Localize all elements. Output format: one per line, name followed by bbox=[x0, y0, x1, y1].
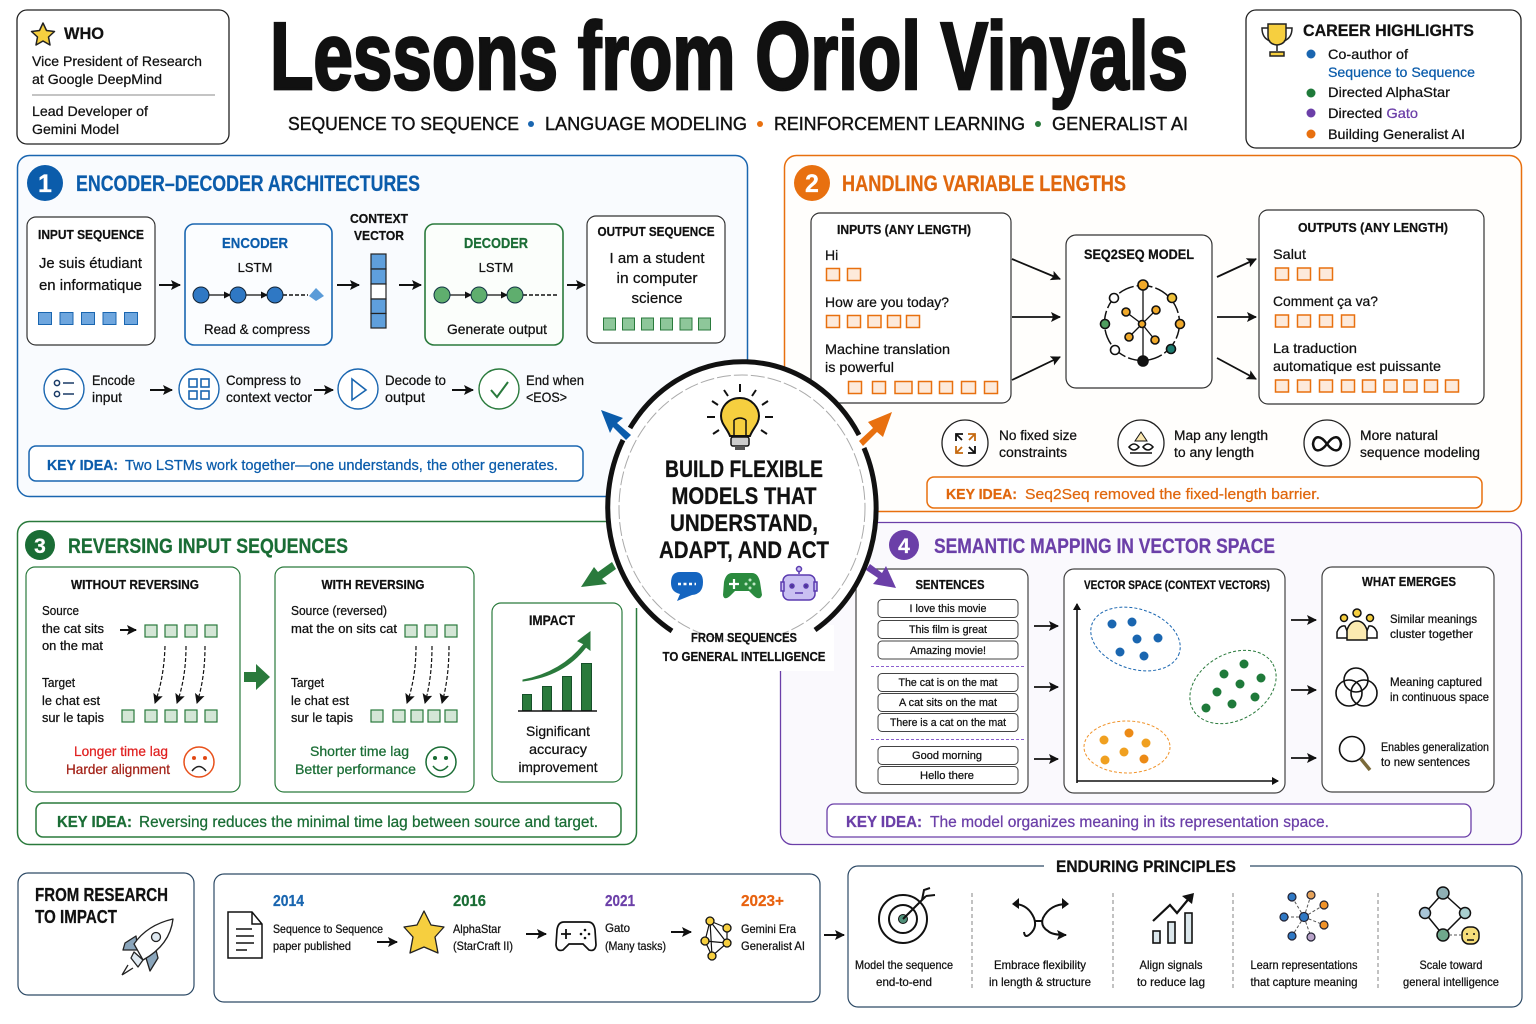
step: end: <EOS> bbox=[526, 389, 567, 405]
timeline 2023+ bbox=[701, 893, 805, 960]
key idea 4: KEY IDEA: bbox=[846, 814, 922, 831]
seq2seq model box: SEQ2SEQ MODEL bbox=[1084, 246, 1194, 262]
feature: natural modeling: sequence modeling bbox=[1360, 445, 1480, 460]
what emerges box: cluster together bbox=[1390, 627, 1473, 641]
inputs box: is powerful bbox=[825, 359, 894, 375]
impact box: accuracy bbox=[529, 741, 587, 757]
output sequence box: science bbox=[632, 290, 682, 307]
timeline 2023+: Generalist AI bbox=[741, 939, 805, 953]
feature: map any length: to any length bbox=[1174, 445, 1254, 460]
hub heading: ADAPT, AND ACT bbox=[659, 537, 829, 564]
step: compress: Compress to bbox=[226, 372, 301, 388]
principle: learn representations: that capture meaning bbox=[1250, 975, 1358, 989]
principle: model end-to-end: end-to-end bbox=[876, 975, 932, 989]
timeline 2016: 2016 bbox=[453, 893, 486, 910]
key idea 3 bbox=[36, 803, 621, 837]
inputs box bbox=[811, 213, 1011, 403]
timeline 2021: (Many tasks) bbox=[605, 939, 666, 953]
encoder box: LSTM bbox=[238, 260, 272, 275]
hub background bbox=[608, 363, 876, 671]
outputs box: Salut bbox=[1273, 246, 1306, 262]
outputs box: La traduction bbox=[1273, 340, 1357, 356]
key idea 2: KEY IDEA: bbox=[946, 486, 1017, 503]
career list: Directed Gato bbox=[1328, 105, 1418, 121]
icon: overlapping circles bbox=[1336, 668, 1377, 706]
arrow bbox=[452, 389, 473, 391]
key idea 1: Two LSTMs work together—one understands, the other generates. bbox=[125, 457, 558, 474]
arrow bbox=[314, 389, 333, 391]
with reversing box: mat the on sits cat bbox=[291, 622, 398, 636]
without reversing box: sur le tapis bbox=[42, 711, 104, 725]
who text bbox=[32, 53, 215, 137]
arrow: hub to panel 1 bbox=[601, 410, 631, 440]
inputs box: INPUTS (ANY LENGTH) bbox=[837, 222, 971, 237]
inputs box: Machine translation bbox=[825, 341, 950, 357]
what emerges box bbox=[1322, 567, 1494, 792]
panel: who bbox=[17, 10, 229, 144]
icon: trophy bbox=[1262, 24, 1292, 56]
principle: scale toward general intelligence: general intelligence bbox=[1403, 975, 1499, 989]
principles heading: ENDURING PRINCIPLES bbox=[1056, 857, 1236, 876]
arrows to what emerges bbox=[1291, 620, 1316, 758]
timeline 2014: Sequence to Sequence bbox=[273, 922, 383, 936]
feature: no fixed size bbox=[942, 420, 1077, 466]
career list: Sequence to Sequence bbox=[1328, 64, 1475, 80]
with reversing box: le chat est bbox=[291, 694, 350, 708]
sentences box: I love this movie bbox=[910, 603, 986, 615]
vector space chart: VECTOR SPACE (CONTEXT VECTORS) bbox=[1084, 578, 1270, 592]
arrow bbox=[377, 941, 397, 943]
principle: align signals: Align signals bbox=[1140, 958, 1202, 972]
step: decode: Decode to bbox=[385, 372, 446, 388]
subtitle: GENERALIST AI bbox=[1052, 114, 1188, 134]
arrows to model bbox=[1012, 259, 1060, 380]
key idea 2 bbox=[927, 477, 1482, 508]
key idea 3: KEY IDEA: bbox=[57, 814, 132, 831]
encoder box bbox=[185, 224, 332, 345]
sentences box: Amazing movie! bbox=[910, 645, 986, 657]
context vector: VECTOR bbox=[354, 228, 405, 243]
who text: at Google DeepMind bbox=[32, 71, 162, 87]
principle: learn representations bbox=[1250, 891, 1358, 989]
who text: Vice President of Research bbox=[32, 53, 202, 69]
sentences box: The cat is on the mat bbox=[898, 677, 998, 689]
without reversing box: the cat sits bbox=[42, 622, 104, 636]
timeline 2014: paper published bbox=[273, 939, 351, 953]
timeline 2014: 2014 bbox=[273, 893, 304, 910]
badge 1 bbox=[27, 165, 63, 201]
sentences box: Hello there bbox=[920, 770, 974, 782]
principle: model end-to-end: Model the sequence bbox=[855, 958, 953, 972]
career heading: CAREER HIGHLIGHTS bbox=[1303, 21, 1474, 40]
with reversing box: Source (reversed) bbox=[291, 604, 387, 618]
principle: flexibility: Embrace flexibility bbox=[994, 958, 1086, 972]
without reversing box: Target bbox=[42, 676, 75, 690]
seq2seq model box bbox=[1066, 235, 1212, 388]
without reversing box bbox=[26, 567, 240, 792]
panel: timeline bbox=[214, 874, 820, 1002]
impact box bbox=[492, 603, 622, 782]
timeline 2023+: 2023+ bbox=[741, 893, 784, 910]
icon: sad face bbox=[184, 747, 214, 777]
badge 2: 2 bbox=[805, 170, 819, 198]
panel 1: encoder-decoder architectures bbox=[18, 156, 748, 496]
outputs box: OUTPUTS (ANY LENGTH) bbox=[1298, 220, 1448, 235]
subtitle: LANGUAGE MODELING bbox=[545, 114, 747, 134]
impact box: Significant bbox=[526, 723, 590, 739]
step: encode input: input bbox=[92, 389, 122, 405]
arrow bbox=[337, 284, 359, 286]
context vector bbox=[350, 211, 408, 328]
step: end bbox=[479, 369, 584, 409]
principle: align signals bbox=[1137, 893, 1205, 989]
icon: star bbox=[32, 23, 54, 45]
arrow bbox=[567, 284, 585, 286]
heading 2: HANDLING VARIABLE LENGTHS bbox=[842, 171, 1126, 196]
arrow bbox=[526, 933, 546, 935]
what emerges box: to new sentences bbox=[1381, 755, 1470, 769]
arrows from model bbox=[1217, 259, 1256, 379]
decoder box bbox=[425, 224, 563, 345]
timeline 2021 bbox=[556, 893, 666, 953]
panel: enduring principles bbox=[848, 857, 1522, 1007]
sentences box: Good morning bbox=[912, 750, 982, 762]
key idea 2: Seq2Seq removed the fixed-length barrier. bbox=[1025, 486, 1320, 503]
panel: from research to impact: FROM RESEARCH bbox=[35, 885, 168, 905]
career list: Building Generalist AI bbox=[1328, 126, 1465, 142]
subtitle: REINFORCEMENT LEARNING bbox=[774, 114, 1025, 134]
feature: map any length: Map any length bbox=[1174, 428, 1268, 443]
what emerges box: Similar meanings bbox=[1390, 612, 1477, 626]
hub heading bbox=[659, 456, 829, 564]
what emerges box: Enables generalization bbox=[1381, 740, 1489, 754]
impact box: improvement bbox=[518, 759, 598, 775]
icon: people cluster bbox=[1337, 609, 1377, 640]
feature: no fixed size: constraints bbox=[999, 445, 1067, 460]
badge 2 bbox=[794, 165, 830, 201]
panel 3: reversing input sequences bbox=[18, 522, 636, 844]
key idea 1 bbox=[29, 446, 583, 481]
heading 3: REVERSING INPUT SEQUENCES bbox=[68, 535, 348, 558]
who heading: WHO bbox=[64, 24, 104, 43]
badge 4 bbox=[889, 530, 919, 560]
hub subtitle: TO GENERAL INTELLIGENCE bbox=[662, 649, 826, 664]
key idea 4: The model organizes meaning in its representation space. bbox=[930, 814, 1329, 831]
panel: from research to impact: TO IMPACT bbox=[35, 907, 117, 927]
input sequence box: Je suis étudiant bbox=[39, 255, 143, 272]
sentences box: There is a cat on the mat bbox=[890, 717, 1006, 729]
bar chart bbox=[518, 632, 597, 711]
career list: Directed AlphaStar bbox=[1328, 84, 1450, 100]
arrows to vector space bbox=[1034, 626, 1058, 759]
decoder box: DECODER bbox=[464, 235, 528, 252]
outputs box: automatique est puissante bbox=[1273, 358, 1441, 374]
sentences box: A cat sits on the mat bbox=[899, 697, 997, 709]
outputs box: Comment ça va? bbox=[1273, 293, 1378, 309]
timeline 2023+: Gemini Era bbox=[741, 922, 796, 936]
arrow: hub to panel 2 bbox=[859, 412, 892, 446]
timeline 2014 bbox=[228, 893, 383, 958]
input sequence box: INPUT SEQUENCE bbox=[38, 227, 144, 242]
who text: Gemini Model bbox=[32, 121, 119, 137]
feature: natural modeling bbox=[1304, 420, 1480, 466]
encoder box: ENCODER bbox=[222, 235, 288, 252]
with reversing box: sur le tapis bbox=[291, 711, 353, 725]
output sequence box: I am a student bbox=[610, 250, 705, 267]
impact box: IMPACT bbox=[529, 612, 575, 628]
without reversing box: le chat est bbox=[42, 694, 101, 708]
with reversing box: Target bbox=[291, 676, 324, 690]
icon: gamepad bbox=[723, 573, 762, 598]
principle: learn representations: Learn representations bbox=[1250, 958, 1358, 972]
timeline 2016: AlphaStar bbox=[453, 922, 501, 936]
principle: model end-to-end bbox=[855, 888, 953, 989]
step: compress bbox=[179, 369, 312, 409]
step: decode bbox=[338, 369, 446, 409]
arrow: hub to panel 4 bbox=[866, 564, 896, 588]
heading 4: SEMANTIC MAPPING IN VECTOR SPACE bbox=[934, 535, 1275, 558]
without reversing box: Source bbox=[42, 604, 79, 618]
career list bbox=[1306, 46, 1475, 142]
step: decode: output bbox=[385, 389, 425, 405]
badge 3 bbox=[25, 530, 55, 560]
principle: align signals: to reduce lag bbox=[1137, 975, 1205, 989]
who text: Lead Developer of bbox=[32, 103, 148, 119]
output sequence box: in computer bbox=[616, 270, 698, 287]
what emerges box: WHAT EMERGES bbox=[1362, 574, 1456, 589]
key idea 4 bbox=[827, 804, 1471, 837]
heading 1: ENCODER–DECODER ARCHITECTURES bbox=[76, 171, 420, 196]
subtitle bbox=[288, 114, 1188, 134]
principle: flexibility bbox=[989, 898, 1091, 989]
what emerges box: Meaning captured bbox=[1390, 675, 1482, 689]
panel: from research to impact bbox=[18, 873, 194, 995]
icon: light bulb bbox=[707, 384, 773, 450]
principle: scale toward general intelligence bbox=[1403, 887, 1499, 989]
with reversing box: WITH REVERSING bbox=[322, 577, 424, 592]
arrow bbox=[671, 931, 691, 933]
without reversing box: Longer time lag bbox=[74, 743, 168, 759]
icon: chat bubble bbox=[671, 572, 703, 601]
hub heading: UNDERSTAND, bbox=[670, 510, 818, 537]
input sequence box: en informatique bbox=[39, 277, 142, 294]
arrow bbox=[824, 934, 844, 936]
center hub bbox=[608, 362, 876, 671]
sentences box: SENTENCES bbox=[916, 577, 985, 592]
inputs box: Hi bbox=[825, 247, 838, 263]
principle: flexibility: in length & structure bbox=[989, 975, 1091, 989]
hub subtitle: FROM SEQUENCES bbox=[691, 630, 797, 645]
icon: network bbox=[1100, 280, 1184, 366]
icon: magnifier bbox=[1340, 736, 1370, 770]
step: encode input: Encode bbox=[92, 372, 135, 388]
timeline 2016 bbox=[404, 893, 513, 953]
panel 2: handling variable lengths bbox=[784, 156, 1522, 512]
arrow: hub to panel 3 bbox=[581, 562, 616, 587]
decoder box: Generate output bbox=[447, 321, 547, 337]
subtitle: SEQUENCE TO SEQUENCE bbox=[288, 114, 519, 134]
hub heading: MODELS THAT bbox=[672, 483, 817, 510]
encoder box: Read & compress bbox=[204, 321, 310, 337]
key idea 1: KEY IDEA: bbox=[47, 457, 118, 474]
badge 1: 1 bbox=[38, 170, 52, 198]
decoder box: LSTM bbox=[479, 260, 513, 275]
hub subtitle bbox=[662, 630, 826, 664]
panel: career highlights bbox=[1246, 10, 1521, 148]
vector space chart bbox=[1064, 569, 1289, 793]
without reversing box: Harder alignment bbox=[66, 761, 170, 777]
timeline 2021: 2021 bbox=[605, 893, 635, 910]
output sequence box bbox=[587, 216, 725, 343]
key idea 3: Reversing reduces the minimal time lag between source and target. bbox=[139, 814, 598, 831]
what emerges box: in continuous space bbox=[1390, 690, 1489, 704]
without reversing box: WITHOUT REVERSING bbox=[71, 577, 199, 592]
principle: scale toward general intelligence: Scale toward bbox=[1420, 958, 1482, 972]
with reversing box: Shorter time lag bbox=[310, 743, 409, 759]
hub ring bbox=[608, 362, 876, 631]
feature: map any length bbox=[1118, 420, 1268, 466]
badge 3: 3 bbox=[34, 535, 46, 558]
timeline 2016: (StarCraft II) bbox=[453, 939, 513, 953]
feature: natural modeling: More natural bbox=[1360, 428, 1438, 443]
sentences box bbox=[856, 569, 1028, 793]
icon: robot bbox=[781, 566, 817, 600]
context vector: CONTEXT bbox=[350, 211, 408, 226]
with reversing box: Better performance bbox=[295, 761, 416, 777]
step: compress: context vector bbox=[226, 389, 312, 405]
inputs box: How are you today? bbox=[825, 294, 949, 310]
hub heading: BUILD FLEXIBLE bbox=[665, 456, 823, 483]
with reversing box bbox=[275, 567, 474, 792]
timeline 2021: Gato bbox=[605, 921, 630, 935]
arrow bbox=[399, 284, 421, 286]
feature: no fixed size: No fixed size bbox=[999, 428, 1077, 443]
arrow bbox=[150, 389, 172, 391]
career list: Co-author of bbox=[1328, 46, 1408, 62]
step: encode input bbox=[44, 369, 135, 409]
output sequence box: OUTPUT SEQUENCE bbox=[598, 224, 715, 239]
step: end: End when bbox=[526, 372, 584, 388]
comparison arrow bbox=[244, 664, 270, 690]
icon: happy face bbox=[426, 747, 456, 777]
without reversing box: on the mat bbox=[42, 639, 104, 653]
badge 4: 4 bbox=[898, 535, 910, 558]
arrow bbox=[159, 284, 180, 286]
icon: rocket bbox=[122, 919, 173, 975]
outputs box bbox=[1259, 210, 1484, 404]
title: Lessons from Oriol Vinyals bbox=[270, 3, 1188, 110]
panel 4: semantic mapping in vector space bbox=[780, 522, 1522, 844]
input sequence box bbox=[27, 217, 155, 345]
sentences box: This film is great bbox=[909, 624, 987, 636]
